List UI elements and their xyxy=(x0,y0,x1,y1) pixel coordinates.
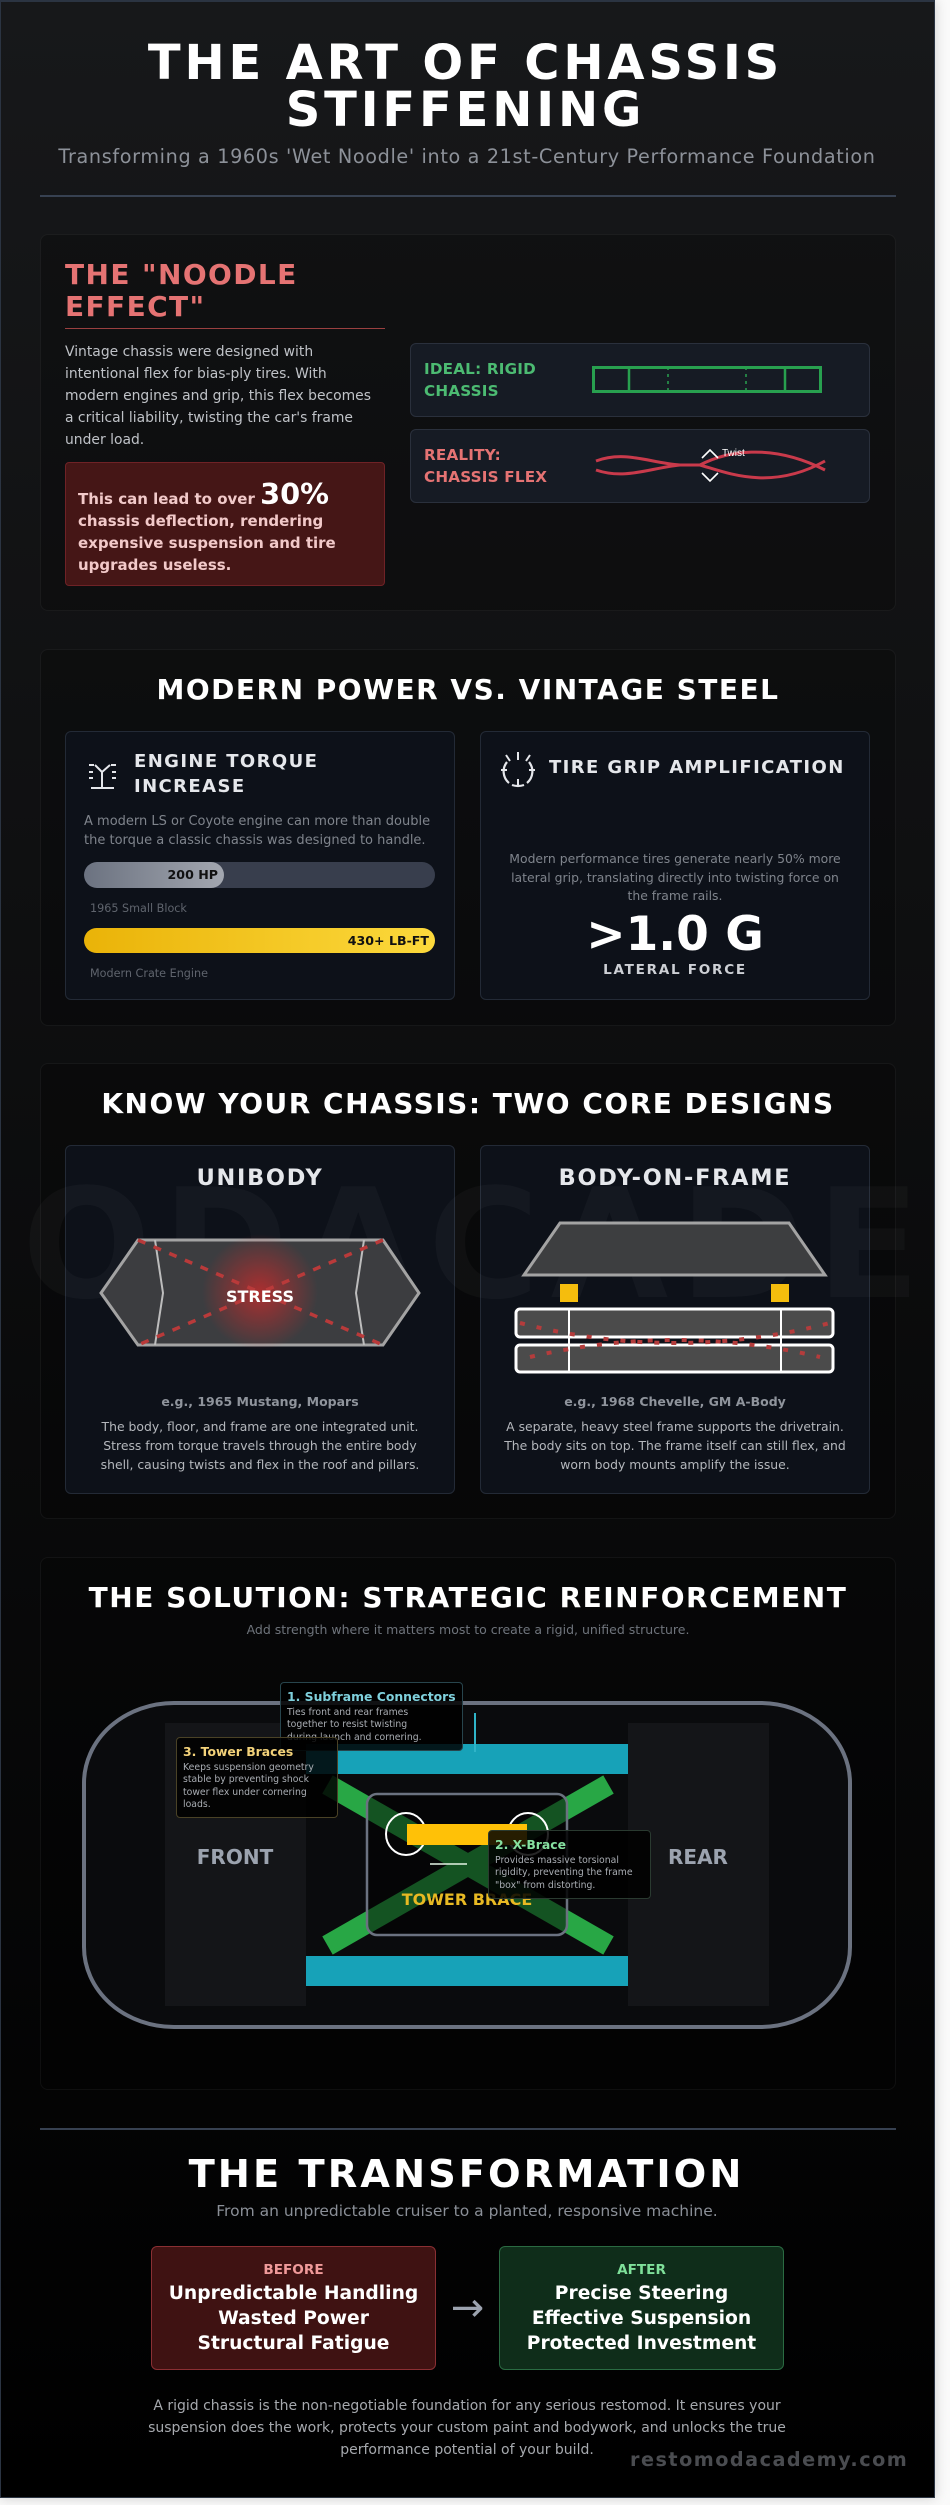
text: body on frame description xyxy=(504,1419,846,1472)
bar: 430+ lb-ft: 430+ LB-FT xyxy=(348,933,429,948)
panel: before xyxy=(151,2246,436,2370)
text: transformation subtitle: From an unpredictable cruiser to a planted, responsive machine. xyxy=(216,2202,718,2220)
callout: subframe connectors: together to resist twisting xyxy=(287,1719,407,1730)
text: body on frame description: The body sits on top. The frame itself can still flex, and xyxy=(504,1438,846,1453)
callout: 30% deflection: This can lead to over 30% xyxy=(78,477,329,511)
text: unibody description: Stress from torque travels through the entire body xyxy=(103,1438,417,1453)
bar: 430+ lb-ft xyxy=(84,928,435,953)
heading: the transformation: THE TRANSFORMATION xyxy=(189,2152,744,2197)
icon: tire xyxy=(501,752,535,788)
heading: body on frame: BODY-ON-FRAME xyxy=(559,1165,791,1191)
text: conclusion: suspension does the work, protects your custom paint and bodywork, and unlocks the true xyxy=(148,2420,786,2436)
heading: modern power: MODERN POWER VS. VINTAGE STEEL xyxy=(156,673,779,706)
diagram: chassis top view: FRONT xyxy=(197,1845,274,1869)
callout: tower braces: loads. xyxy=(183,1799,211,1810)
heading: engine torque increase xyxy=(134,751,318,796)
label: ideal rigid chassis: CHASSIS xyxy=(424,382,499,400)
diagram: twisting chassis: Twist xyxy=(722,448,745,459)
icon: engine xyxy=(89,764,116,789)
diagram: chassis top view: REAR xyxy=(668,1845,728,1869)
heading: know your chassis: KNOW YOUR CHASSIS: TWO CORE DESIGNS xyxy=(101,1087,835,1120)
title: STIFFENING xyxy=(286,82,645,138)
text: conclusion xyxy=(148,2398,786,2458)
callout: subframe connectors: 1. Subframe Connectors xyxy=(287,1689,456,1704)
callout: tower braces: 3. Tower Braces xyxy=(183,1744,293,1759)
panel: after xyxy=(499,2246,784,2370)
panel: after: Precise Steering xyxy=(555,2283,728,2304)
callout: x-brace: 2. X-Brace xyxy=(495,1837,566,1852)
heading: engine torque increase: INCREASE xyxy=(134,776,246,796)
title: THE ART OF CHASSIS xyxy=(148,35,783,91)
diagram: twisting chassis xyxy=(596,448,826,482)
arrow: → xyxy=(451,2285,484,2331)
text: body on frame example: e.g., 1968 Chevelle, GM A-Body xyxy=(564,1394,786,1409)
text: tire grip: lateral grip, translating directly into twisting force on xyxy=(511,870,839,885)
diagram: chassis top view: TOWER BRACE xyxy=(402,1890,532,1909)
label: modern crate engine: Modern Crate Engine xyxy=(90,967,208,980)
diagram: body on frame xyxy=(514,1222,834,1374)
label: lateral force: LATERAL FORCE xyxy=(603,962,747,978)
panel: strategic reinforcement xyxy=(40,1557,896,2090)
callout: subframe connectors xyxy=(280,1682,463,1751)
panel: after: Effective Suspension xyxy=(532,2308,751,2329)
diagram: unibody xyxy=(99,1238,421,1346)
card: unibody xyxy=(65,1145,455,1494)
heading: unibody: UNIBODY xyxy=(197,1165,323,1191)
callout: 30% deflection: upgrades useless. xyxy=(78,556,231,574)
watermark: ODACADE xyxy=(22,1156,931,1333)
callout: tower braces: Keeps suspension geometry xyxy=(183,1762,314,1773)
label: reality chassis flex: REALITY: xyxy=(424,446,501,464)
card: engine torque xyxy=(65,731,455,1000)
panel: reality chassis flex xyxy=(410,429,870,503)
panel: before: Wasted Power xyxy=(218,2308,369,2329)
heading: tire grip amplification: TIRE GRIP AMPLIFICATION xyxy=(549,757,845,778)
diagram: chassis top view xyxy=(82,1701,852,2029)
panel: after: Protected Investment xyxy=(527,2333,756,2354)
callout: 30% deflection: expensive suspension and tire xyxy=(78,534,336,552)
panel: after: AFTER xyxy=(617,2262,666,2278)
stat: 1.0 G: >1.0 G xyxy=(586,907,764,962)
text: engine torque xyxy=(84,814,430,848)
text: unibody description: shell, causing twists and flex in the roof and pillars. xyxy=(101,1457,419,1472)
heading: noodle effect: EFFECT" xyxy=(65,290,206,322)
panel: two core designs xyxy=(40,1063,896,1519)
panel: noodle effect xyxy=(40,234,896,611)
text: unibody description: The body, floor, and frame are one integrated unit. xyxy=(102,1419,418,1434)
label: reality chassis flex xyxy=(424,446,547,486)
text: tire grip xyxy=(509,851,841,903)
text: noodle explanation: modern engines and grip, this flex becomes xyxy=(65,388,371,404)
text: tire grip: Modern performance tires generate nearly 50% more xyxy=(509,851,841,866)
text: noodle explanation: intentional flex for bias-ply tires. With xyxy=(65,366,327,382)
text: conclusion: A rigid chassis is the non-negotiable foundation for any serious restomod. It ensures your xyxy=(153,2398,781,2414)
panel: before: Structural Fatigue xyxy=(198,2333,389,2354)
callout: 30% deflection: chassis deflection, rendering xyxy=(78,512,323,530)
label: 1965 small block: 1965 Small Block xyxy=(90,902,187,915)
heading: noodle effect xyxy=(65,258,298,322)
callout: 30% deflection xyxy=(65,462,385,586)
bar: 200 HP: 200 HP xyxy=(168,867,218,882)
callout: tower braces: tower flex under cornering xyxy=(183,1787,307,1798)
card: tire grip xyxy=(480,731,870,1000)
text: unibody example: e.g., 1965 Mustang, Mopars xyxy=(161,1394,359,1409)
text: body on frame description: worn body mounts amplify the issue. xyxy=(560,1457,790,1472)
callout: x-brace: Provides massive torsional xyxy=(495,1855,619,1866)
text: noodle explanation xyxy=(65,344,371,448)
text: body on frame description: A separate, heavy steel frame supports the drivetrain. xyxy=(506,1419,844,1434)
text: conclusion: performance potential of your build. xyxy=(340,2442,594,2458)
callout: subframe connectors: Ties front and rear frames xyxy=(287,1707,408,1718)
text: noodle explanation: under load. xyxy=(65,432,144,448)
text: noodle explanation: a critical liability, twisting the car's frame xyxy=(65,410,353,426)
text: engine torque: A modern LS or Coyote engine can more than double xyxy=(84,814,430,829)
heading: noodle effect: THE "NOODLE xyxy=(65,258,298,291)
panel: before: BEFORE xyxy=(263,2262,324,2278)
callout: subframe connectors: during launch and cornering. xyxy=(287,1732,422,1743)
label: ideal rigid chassis xyxy=(424,360,536,400)
diagram: rigid chassis xyxy=(592,366,822,393)
heading: the solution: THE SOLUTION: STRATEGIC REINFORCEMENT xyxy=(89,1581,847,1614)
heading: engine torque increase: ENGINE TORQUE xyxy=(134,751,318,772)
text: solution subtitle: Add strength where it matters most to create a rigid, unified structure. xyxy=(247,1622,689,1637)
subtitle: Transforming a 1960s 'Wet Noodle' into a 21st-Century Performance Foundation xyxy=(58,145,876,168)
callout: x-brace: rigidity, preventing the frame xyxy=(495,1867,633,1878)
brand url: restomodacademy.com xyxy=(630,2448,908,2471)
label: ideal rigid chassis: IDEAL: RIGID xyxy=(424,360,536,378)
panel: modern power vs vintage steel xyxy=(40,649,896,1026)
diagram: unibody: STRESS xyxy=(226,1287,294,1306)
panel: before: Unpredictable Handling xyxy=(169,2283,418,2304)
text: tire grip: the frame rails. xyxy=(628,888,722,903)
callout: tower braces: stable by preventing shock xyxy=(183,1774,309,1785)
text: unibody description xyxy=(101,1419,419,1472)
panel: ideal rigid chassis xyxy=(410,343,870,417)
text: noodle explanation: Vintage chassis were designed with xyxy=(65,344,313,360)
callout: x-brace: "box" from distorting. xyxy=(495,1880,595,1891)
callout: tower braces xyxy=(176,1737,338,1818)
bar: 200 HP xyxy=(84,862,435,888)
card: body on frame xyxy=(480,1145,870,1494)
title xyxy=(148,35,783,138)
text: engine torque: the torque a classic chassis was designed to handle. xyxy=(84,833,426,848)
callout: x-brace xyxy=(488,1830,651,1899)
label: reality chassis flex: CHASSIS FLEX xyxy=(424,468,547,486)
